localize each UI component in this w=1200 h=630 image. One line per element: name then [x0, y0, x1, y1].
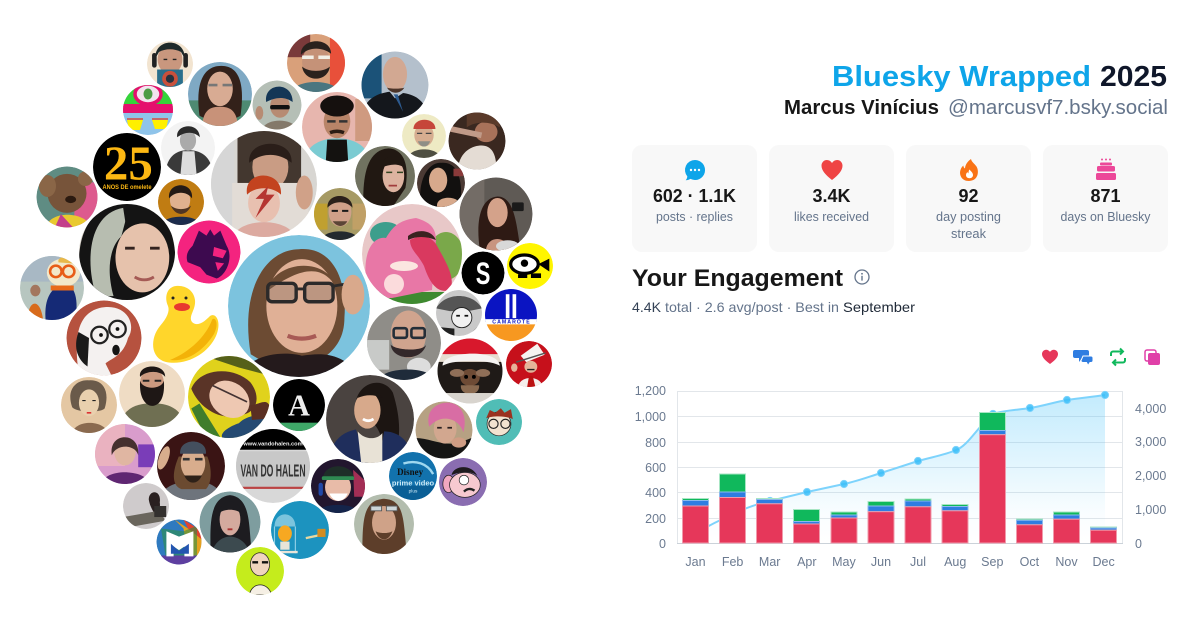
avatar: letter S logo: S: [476, 255, 490, 291]
avatar: woman with black bangs: [200, 492, 260, 552]
icon: reposts: [1111, 348, 1125, 366]
panel: stat likes received: [769, 145, 894, 252]
left axis labels: [635, 384, 666, 551]
stat value: 871: [1090, 186, 1120, 206]
avatar: long-haired man with glasses on forehead: [354, 494, 414, 554]
month labels: Jun: [871, 555, 891, 569]
engagement summary text: September: [843, 299, 915, 315]
stat label: day posting: [936, 210, 1001, 224]
avatar: cartoon man on purple: [439, 458, 487, 506]
avatar: letter A logo: A: [288, 388, 310, 422]
stat value: 602 · 1.1K: [653, 186, 736, 206]
reposts: [682, 412, 1116, 528]
title: Bluesky Wrapped 2025: 2025: [1100, 61, 1167, 93]
stat label: days on Bluesky: [1060, 210, 1151, 224]
user name and handle: [784, 97, 1168, 119]
panel: stat posts and replies: [632, 145, 757, 252]
avatar: Disney prime video: Disney: [397, 467, 423, 478]
engagement summary text: total · 2.6 avg/post · Best in: [665, 299, 839, 315]
avatar: Van Do Halen sign: www.vandohalen.com: [242, 441, 303, 447]
month labels: Jul: [910, 555, 926, 569]
avatar: Premier League lion: [178, 220, 240, 284]
right axis labels: 4,000: [1135, 402, 1166, 416]
avatar: cartoon man in red cap: [402, 114, 446, 158]
month labels: Feb: [722, 555, 743, 569]
avatar: Van Do Halen sign: VAN DO HALEN: [240, 460, 306, 480]
icon: birthday cake: [1096, 158, 1116, 180]
icon: chat bubble: [685, 160, 705, 180]
avatar: woman with camera: [460, 178, 532, 252]
avatar: woman in blue blazer: [326, 375, 414, 463]
icon: flame: [960, 159, 978, 181]
avatar: woman with glasses: [188, 62, 252, 126]
month labels: Nov: [1055, 555, 1078, 569]
avatar: Lickitung cartoon: [362, 204, 464, 304]
avatar: woman with two-tone hair: [79, 202, 176, 300]
avatar: letter S logo: [462, 252, 504, 294]
avatar: couple kissing: [448, 112, 506, 170]
avatar: woman with tattoos: [123, 483, 169, 529]
avatar: man holding Bowie cover: [211, 131, 317, 237]
avatar: woman on yellow background: [188, 356, 270, 438]
area under cumulative line: [696, 395, 1105, 543]
icon: yellow rubber duck: [153, 286, 218, 363]
avatar: Camarote da Republica logo: [485, 289, 537, 341]
icon: quotes: [1145, 350, 1160, 365]
avatar: main profile, man with glasses: [228, 235, 370, 377]
stat value: 92: [958, 186, 979, 206]
cumulative line: [696, 395, 1105, 533]
avatar: bearded man in green shirt: [119, 361, 185, 427]
month labels: May: [832, 555, 856, 569]
right axis labels: 3,000: [1135, 435, 1166, 449]
avatar: 25 anos de Omelete logo: ANOS DE omelete: [103, 184, 152, 191]
likes: [682, 435, 1116, 543]
month labels: Aug: [944, 555, 966, 569]
engagement summary text: [632, 299, 915, 315]
engagement summary text: 4.4K: [632, 299, 662, 315]
avatar: Gizmo in Santa hat: [438, 338, 502, 404]
user name and handle: @marcusvf7.bsky.social: [948, 97, 1168, 119]
avatar: woman with Pororo mascot: [20, 256, 84, 320]
left axis labels: 800: [645, 436, 666, 450]
avatar: eye fish logo on yellow: [507, 243, 553, 289]
month labels: Apr: [797, 555, 817, 569]
avatar: man in white hat on red: [506, 341, 552, 387]
avatar: man with beanie: [155, 432, 225, 500]
title: Bluesky Wrapped 2025: Bluesky Wrapped: [832, 61, 1091, 93]
avatar: rainbow M logo: [156, 520, 202, 564]
icon: info: [855, 270, 869, 284]
month labels: Mar: [759, 555, 780, 569]
avatar: smiling man in cap: [311, 459, 365, 513]
avatar: woman with blue turban: [252, 80, 302, 130]
user name and handle: Marcus Vinícius: [784, 97, 939, 119]
avatar: cartoon man on teal: [476, 399, 522, 445]
icon: replies: [1073, 350, 1093, 366]
avatar: man with glasses in bookstore: [314, 188, 366, 240]
avatar: bearded man with white glasses: [287, 34, 345, 92]
avatar: bald man in suit: [362, 52, 428, 118]
replies: [682, 430, 1116, 530]
avatar: man in black and white: [161, 121, 215, 175]
avatar: 25 anos de Omelete logo: [93, 133, 161, 201]
right axis labels: 2,000: [1135, 469, 1166, 483]
avatar: woman with dark bangs: [355, 146, 415, 206]
avatar: light bulb in cage on teal blue: [271, 501, 329, 559]
left axis labels: 200: [645, 512, 666, 526]
stat label: streak: [951, 227, 987, 241]
avatar: bald cartoon on lime: [236, 547, 284, 595]
line points: [766, 391, 1109, 505]
stat label: likes received: [794, 210, 869, 224]
avatar: Brazil cap cartoon: [123, 84, 173, 135]
avatar: Snoopy-style Sherman cartoon: [66, 300, 142, 376]
avatar: Disney prime video: prime video: [392, 479, 434, 488]
left axis labels: 1,200: [635, 384, 666, 398]
right axis labels: 0: [1135, 537, 1142, 551]
left axis labels: 400: [645, 486, 666, 500]
avatar: man with beard on orange: [158, 179, 204, 225]
stat label: [936, 210, 1001, 241]
panel: stat day posting streak: [906, 145, 1031, 252]
avatar: 25 anos de Omelete logo: 25: [104, 135, 153, 190]
avatar: man with headphones: [147, 41, 193, 88]
month labels: Oct: [1020, 555, 1040, 569]
stacked bars: [682, 412, 1116, 543]
avatar: woman with pink hair: [416, 402, 472, 458]
left axis labels: 0: [659, 537, 666, 551]
avatar: manga character: [436, 290, 482, 336]
icon: like heart: [1042, 350, 1058, 364]
avatar: furry mascot: [36, 166, 98, 228]
avatar: letter A logo: [273, 379, 325, 431]
heading: Your Engagement: Your Engagement: [632, 265, 843, 292]
avatar bubble cluster: [20, 34, 553, 595]
stat value: 3.4K: [812, 186, 850, 206]
avatar: Disney prime video: plus: [409, 488, 418, 494]
month labels: Dec: [1092, 555, 1115, 569]
avatar: Van Do Halen sign: [236, 429, 310, 503]
right axis labels: 1,000: [1135, 503, 1166, 517]
avatar: woman with curly black hair: [417, 159, 465, 207]
chart: monthly engagement: [635, 384, 1166, 569]
month labels: [685, 555, 1115, 569]
chart legend icons: [1042, 348, 1160, 366]
avatar: drawn portrait of a woman: [61, 377, 117, 433]
stat label: posts · replies: [656, 210, 733, 224]
month labels: Jan: [685, 555, 706, 569]
month labels: Sep: [981, 555, 1003, 569]
chart grid: [677, 391, 1123, 543]
avatar: Camarote da Republica logo: CAMAROTE: [492, 319, 530, 325]
avatar: bald man with glasses: [367, 306, 441, 380]
left axis labels: 1,000: [635, 410, 666, 424]
left axis labels: 600: [645, 461, 666, 475]
avatar: woman on pink background: [95, 424, 155, 484]
right axis labels: [1135, 402, 1166, 551]
avatar: curly-haired man in floral shirt: [302, 92, 372, 162]
panel: stat days on Bluesky: [1043, 145, 1168, 252]
icon: heart: [822, 160, 842, 180]
avatar: Disney prime video: [389, 452, 437, 500]
